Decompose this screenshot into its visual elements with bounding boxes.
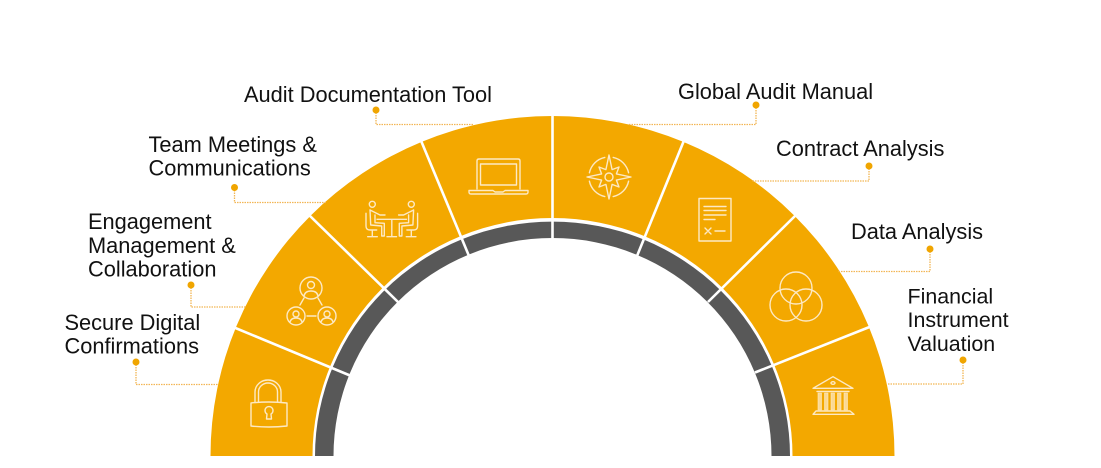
icon: compass rose — [587, 155, 631, 199]
label: Engagement Management & Collaboration: Management & — [88, 233, 236, 258]
connector: Audit Documentation Tool — [372, 106, 473, 124]
label: Contract Analysis: Contract Analysis — [776, 136, 944, 161]
label: Engagement Management & Collaboration: Engagement — [88, 209, 212, 234]
label: Global Audit Manual: Global Audit Manual — [678, 79, 873, 104]
connector: Contract Analysis — [752, 162, 872, 181]
label: Financial Instrument Valuation: Financial — [908, 284, 993, 308]
label: Team Meetings & Communications: Team Meetings & — [148, 132, 317, 157]
icon: overlapping circles — [770, 272, 822, 321]
yellow arch — [210, 116, 894, 456]
label: Audit Documentation Tool: Audit Documentation Tool — [244, 82, 492, 107]
label: Financial Instrument Valuation: Valuation — [908, 332, 995, 356]
connector: Global Audit Manual — [628, 102, 760, 124]
dark inner ring — [315, 222, 790, 456]
icon: network of people — [287, 277, 336, 325]
icon: two people meeting at a table — [366, 201, 418, 237]
icon: laptop — [469, 159, 528, 194]
connector: Secure Digital Confirmations — [132, 358, 218, 384]
icon: contract document — [699, 198, 731, 241]
label: Secure Digital Confirmations: Confirmations — [64, 334, 199, 358]
label: Financial Instrument Valuation: Instrument — [908, 308, 1009, 332]
icon: bank building — [813, 377, 854, 414]
icon: padlock — [251, 380, 287, 427]
label: Team Meetings & Communications: Communications — [148, 156, 311, 180]
connector: Engagement Management & Collaboration — [188, 282, 246, 307]
connector: Financial Instrument Valuation — [887, 356, 966, 384]
label: Data Analysis: Data Analysis — [851, 219, 983, 244]
label: Engagement Management & Collaboration: Collaboration — [88, 256, 216, 282]
label: Secure Digital Confirmations: Secure Digital — [64, 310, 200, 335]
connector: Team Meetings & Communications — [231, 184, 327, 202]
connector: Data Analysis — [838, 246, 934, 272]
segment dividers — [233, 110, 872, 376]
